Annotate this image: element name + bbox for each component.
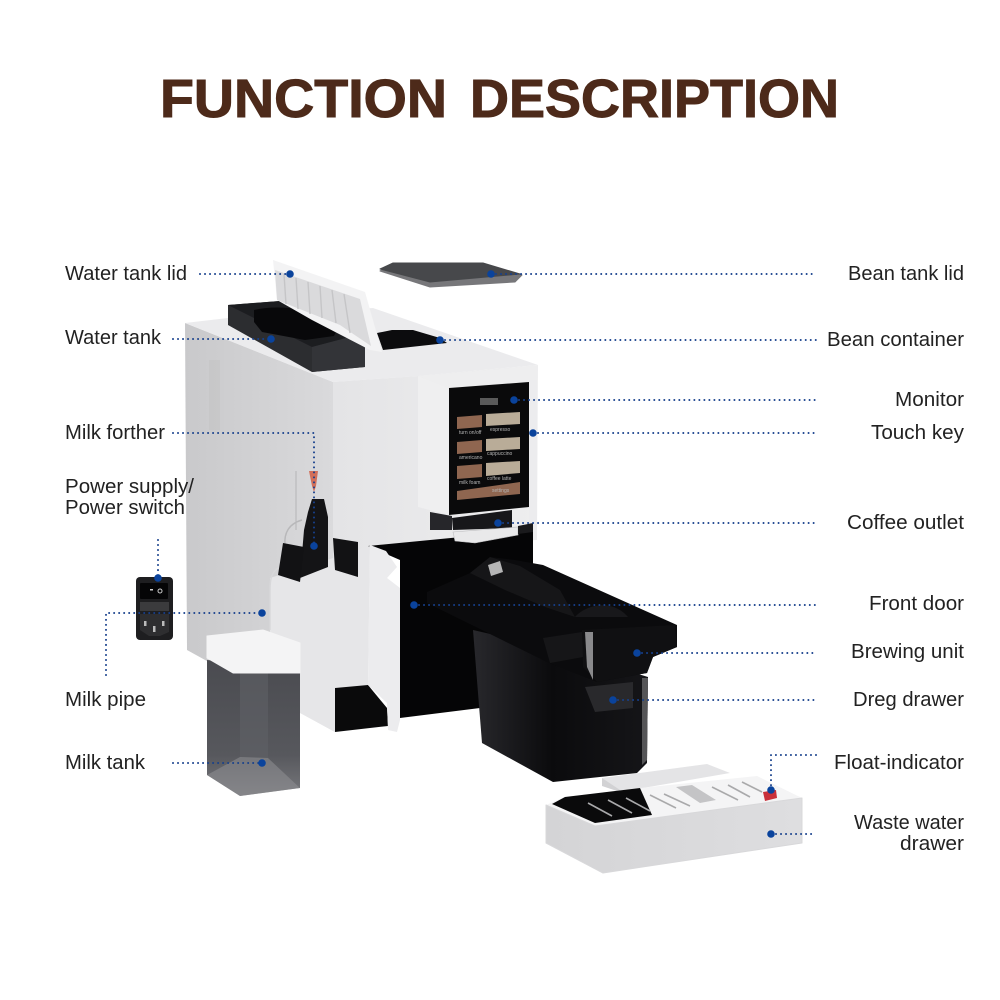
head side <box>418 376 449 515</box>
callout: brewing unit: Brewing unit <box>851 641 964 663</box>
callout: dreg drawer <box>609 689 964 711</box>
float indicator <box>763 790 777 801</box>
coffee machine body <box>185 308 538 732</box>
callout: dreg drawer: Dreg drawer <box>853 689 964 711</box>
waste water drawer <box>546 764 802 873</box>
callout: milk pipe: Milk pipe <box>65 689 146 711</box>
callout: waste water drawer: drawer <box>900 833 964 855</box>
title <box>160 69 839 129</box>
callout: power supply / power switch: Power switch <box>65 497 185 519</box>
frother tube <box>285 520 302 545</box>
machine side panel <box>185 323 335 732</box>
callout: bean tank lid: Bean tank lid <box>848 263 964 285</box>
callout: monitor <box>510 389 964 411</box>
inner cavity <box>368 530 533 718</box>
callout: milk forther: Milk forther <box>65 422 165 444</box>
milk tank inner shading <box>240 673 268 760</box>
head top <box>418 366 537 388</box>
callout: coffee outlet: Coffee outlet <box>847 512 964 534</box>
fuse slot <box>140 602 169 611</box>
touch screen monitor <box>449 382 529 515</box>
milk tank bottom <box>207 757 300 796</box>
left bracket <box>278 543 304 582</box>
callout: waste water drawer: Waste water <box>854 812 964 834</box>
ventilation holes <box>209 360 220 430</box>
brewing unit dome <box>575 605 628 617</box>
callout: milk tank: Milk tank <box>65 752 146 774</box>
callout: float-indicator: Float-indicator <box>834 752 964 774</box>
callout: water tank lid <box>65 263 294 285</box>
machine top panel <box>185 308 538 382</box>
callout: power supply / power switch <box>65 476 194 582</box>
title: DESCRIPTION <box>470 69 839 129</box>
machine front panel <box>333 365 538 560</box>
milk tank lid <box>207 630 300 673</box>
power switch module <box>136 577 173 640</box>
drawer opening <box>552 788 652 823</box>
callout: coffee outlet <box>494 512 964 534</box>
callout: monitor: Monitor <box>895 389 964 411</box>
touch keys: cappuccino <box>487 451 513 457</box>
rocker switch <box>140 583 168 599</box>
callout: bean container: Bean container <box>827 329 964 351</box>
touch keys: settings <box>492 488 510 494</box>
head right strip <box>529 380 537 530</box>
milk tank <box>207 630 300 796</box>
touch keys: espresso <box>490 427 511 433</box>
right bracket <box>333 538 358 577</box>
callout: milk forther <box>65 422 318 550</box>
callout: front door <box>410 593 964 615</box>
callout: milk tank <box>65 752 266 774</box>
drawer slots <box>588 782 762 816</box>
callout: water tank lid: Water tank lid <box>65 263 187 285</box>
callout: front door: Front door <box>869 593 964 615</box>
brewing unit front <box>582 625 677 682</box>
callout: touch key: Touch key <box>871 422 964 444</box>
dreg drawer <box>473 630 648 782</box>
bean tank lid <box>380 263 522 287</box>
callout: water tank: Water tank <box>65 327 162 349</box>
drawer centre window <box>676 785 716 803</box>
callout: bean tank lid <box>487 263 964 285</box>
bean container opening <box>377 330 447 350</box>
callout: waste water drawer <box>767 812 964 855</box>
back tray <box>602 764 730 792</box>
touch keys: coffee latte <box>487 476 512 482</box>
callout: float-indicator <box>767 752 964 794</box>
touch keys <box>457 412 520 500</box>
water tank <box>228 301 365 372</box>
milk pipe tube <box>270 568 278 630</box>
touch keys: turn on/off <box>459 430 482 436</box>
brewing unit <box>427 557 677 682</box>
drawer top <box>546 776 802 826</box>
callout: brewing unit <box>633 641 964 663</box>
brewing unit highlight <box>488 561 503 576</box>
power socket <box>140 614 169 636</box>
touch keys: americano <box>459 455 483 461</box>
callout: milk pipe <box>65 609 266 711</box>
milk frother assembly <box>278 471 358 582</box>
touch keys: milk foam <box>459 480 480 486</box>
monitor logo <box>480 398 498 405</box>
front lower panel <box>270 546 370 732</box>
drawer front face <box>546 798 802 873</box>
machine base <box>335 685 388 732</box>
milk tank body <box>207 660 300 796</box>
frother needle <box>309 471 318 492</box>
title: FUNCTION <box>160 69 447 129</box>
callout: bean container <box>436 329 964 351</box>
frother column <box>300 499 328 578</box>
callout: water tank <box>65 327 275 349</box>
callout: touch key <box>529 422 964 444</box>
coffee outlet <box>430 510 533 543</box>
front door <box>368 545 400 732</box>
water tank lid <box>273 260 382 352</box>
callout: power supply / power switch: Power supply/ <box>65 476 194 498</box>
brewing unit top housing <box>470 557 575 617</box>
